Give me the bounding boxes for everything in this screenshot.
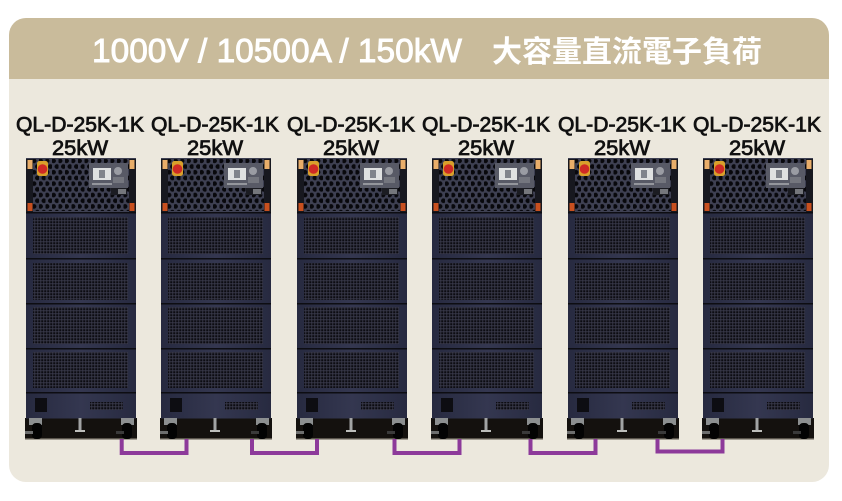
unit 5: QL-D-25K-1K bbox=[558, 112, 687, 136]
unit 6 bbox=[693, 112, 822, 440]
unit 1: 25kW bbox=[52, 136, 109, 160]
title banner: 1000V / 10500A / 150kW bbox=[92, 32, 463, 69]
unit 3: QL-D-25K-1K bbox=[287, 112, 416, 136]
unit 2: QL-D-25K-1K bbox=[151, 112, 280, 136]
unit 4 bbox=[422, 112, 551, 440]
unit 1 bbox=[16, 112, 145, 440]
unit 3: 25kW bbox=[323, 136, 380, 160]
unit 4: QL-D-25K-1K bbox=[422, 112, 551, 136]
unit 2: 25kW bbox=[187, 136, 244, 160]
title banner: 大容量直流電子負荷 bbox=[492, 27, 762, 71]
unit 2 bbox=[151, 112, 280, 440]
unit 5: 25kW bbox=[594, 136, 651, 160]
purple connecting cables bbox=[122, 439, 722, 453]
unit 4: 25kW bbox=[458, 136, 515, 160]
title banner bbox=[9, 18, 829, 79]
unit 3 bbox=[287, 112, 416, 440]
unit 1: QL-D-25K-1K bbox=[16, 112, 145, 136]
unit 6: QL-D-25K-1K bbox=[693, 112, 822, 136]
unit 6: 25kW bbox=[729, 136, 786, 160]
unit 5 bbox=[558, 112, 687, 440]
